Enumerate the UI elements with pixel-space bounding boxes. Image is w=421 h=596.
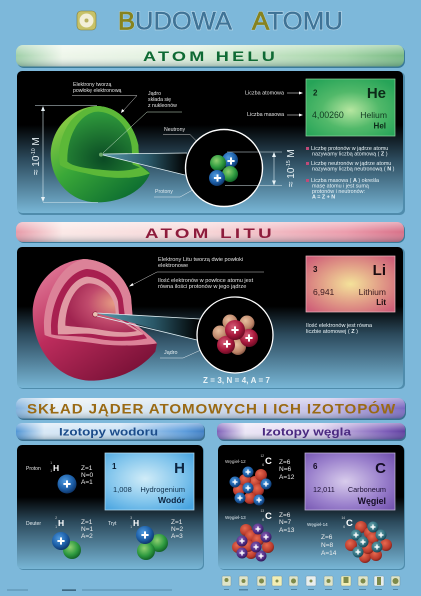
label: nucleus [103,91,182,153]
banner: Atom litu: ATOM LITU [145,225,275,241]
carbon 14: 14 [341,516,345,520]
tritium: 1 [130,525,132,529]
carbon 14: Z=6 [321,534,333,541]
carbon 13: 13 [260,509,264,513]
element card: helium: 2 [313,88,318,98]
element card: lithium: Lit [376,298,386,307]
banner: isotopes heading: SKŁAD JĄDER ATOMOWYCH I ICH IZOTOPÓW [27,400,396,416]
dimension: atom diameter: -10 [31,148,37,156]
tritium: H [133,518,139,528]
label: nucleus: składa się [148,97,171,103]
proton: 1 [50,461,52,465]
title: ATOMU [252,8,343,36]
element card: hydrogen: 1,008 [113,485,132,494]
element card: hydrogen: Hydrogenium [140,485,185,494]
label: nucleus: Jądro [148,91,161,97]
notes: helium definitions: masę atomu i jest sumą [312,184,369,190]
illustration: lithium atom cutaway sphere [33,259,200,381]
proton: A=1 [81,479,93,486]
element card: helium: He [367,85,386,102]
dimension: atom diameter [31,106,98,202]
banner: Atom helu: ATOM HELU [143,48,278,64]
carbon 12: Z=6 [279,459,291,466]
icon: title atom badge [77,11,96,30]
tritium: Tryt [108,521,117,527]
notes: helium definitions: Liczbę neutronów w jądrze atomu [311,161,391,167]
element card: hydrogen [105,453,194,510]
carbon 12: N=6 [279,466,291,473]
note: lithium [306,323,373,335]
title [118,8,343,36]
carbon 14: N=8 [321,542,333,549]
deuterium: A=2 [81,533,93,540]
carbon 12: Węgiel-12 [225,459,246,464]
label: atomic number [245,90,303,96]
notes: helium definitions: protonów i neutronów: [312,189,365,195]
carbon 14: A=14 [321,550,337,557]
banner: carbon isotopes: Izotopy węgla [262,426,352,438]
label: atomic number: Liczba atomowa [245,90,284,96]
element card: lithium: Li [373,262,386,279]
tritium: 3 [130,516,132,520]
element card: carbon: Carboneum [348,485,386,494]
element card: carbon [305,453,395,510]
deuterium: 2 [55,516,57,520]
proton: Z=1 [81,465,93,472]
banner: carbon isotopes [217,423,406,441]
label: lithium electrons: Elektrony Litu tworzą dwie powłoki [158,257,243,263]
element card: carbon: 12,011 [313,485,335,494]
carbon 12 [225,454,295,506]
element card: helium: Helium [360,110,387,120]
element card: helium: Hel [374,122,386,130]
deuterium: N=1 [81,526,93,533]
element card: hydrogen: 1 [112,462,117,471]
label: lithium electrons: Ilość elektronów w powłoce atomu jest [158,278,254,284]
carbon 14: 6 [343,525,345,529]
element card: helium: 4,00260 [312,110,344,120]
label: mass number [247,112,303,118]
notes: helium definitions [306,146,395,200]
proton: N=0 [81,472,93,479]
carbon 13: A=13 [279,527,295,534]
element card: hydrogen: Wodór [158,495,186,505]
label: neutrons [163,127,213,158]
dimension: nucleus diameter: ≈ 10 [286,168,297,187]
proton [26,461,93,494]
note: lithium: liczbie atomowej ( Z ) [306,329,358,335]
element card: hydrogen: H [174,460,185,477]
banner: isotopes heading [16,398,406,420]
element card: lithium: 6,941 [313,287,335,297]
dimension: nucleus diameter: -15 [286,160,292,168]
carbon 13 [225,509,295,562]
proton: H [53,463,59,473]
tritium: Z=1 [171,519,183,526]
carbon 12: A=12 [279,474,295,481]
carbon 14: C [346,518,353,529]
caption: lithium numbers: Z = 3, N = 4, A = 7 [203,376,271,385]
panel: hydrogen isotopes [17,445,204,570]
panel: atom litu [17,247,405,389]
carbon 13: Węgiel-13 [225,515,246,520]
label: lithium electrons: równa ilości protonów w jego jądrze [158,284,246,290]
label: nucleus: Jądro [164,350,178,356]
label: protons [154,182,207,197]
label: lithium electrons: elektronowe [158,263,188,269]
title: ATOMU [252,8,343,36]
dimension: nucleus diameter [225,149,297,187]
label: nucleus: z nukleonów [148,103,177,109]
footer: publisher line [7,590,172,591]
tritium: N=2 [171,526,183,533]
element card: lithium: 3 [313,265,318,274]
element card: carbon: C [375,460,386,477]
carbon 13: 6 [262,518,264,522]
carbon 12: 6 [262,463,264,467]
notes: helium definitions: A = Z + N [312,194,335,200]
carbon 13: C [265,511,272,522]
label: nucleus [160,345,212,358]
deuterium: H [58,518,64,528]
element card: carbon: 6 [313,462,318,471]
deuterium: Deuter [26,521,41,527]
label: lithium electrons [129,257,264,290]
element card: helium [306,79,395,136]
label: electrons [72,82,137,113]
carbon 14: Węgiel-14 [307,522,328,527]
proton: Proton [26,466,41,472]
notes: helium definitions: nazywamy liczbą atomową ( Z ) [312,152,388,158]
proton: 1 [50,469,52,473]
panel: atom helu [17,71,405,215]
element card: lithium [306,256,395,312]
tritium: A=3 [171,533,183,540]
magnified helium nucleus [186,130,262,206]
dimension: atom diameter: ≈ 10 [31,156,42,175]
deuterium: Z=1 [81,519,93,526]
banner: Atom helu [16,45,405,68]
tritium [108,516,183,560]
dimension: atom diameter: M [31,137,42,148]
notes: helium definitions: Liczba masowa ( A ) określa [311,178,379,184]
banner: hydrogen isotopes: Izotopy wodoru [59,426,158,438]
element card: carbon: Węgiel [358,496,386,506]
wedge lines [103,153,187,175]
title: BUDOWA [118,8,232,36]
dimension: nucleus diameter: M [286,149,297,160]
carbon 12: C [265,456,272,467]
notes: helium definitions: Liczbę protonów w jądrze atomu [311,146,388,152]
carbon 13: N=7 [279,519,291,526]
magnified lithium nucleus [197,297,273,373]
title: BUDOWA [118,8,232,36]
carbon 14 [307,516,392,563]
carbon 12: 12 [260,454,264,458]
label: electrons: Elektrony tworzą [73,82,111,88]
panel: carbon isotopes [218,445,405,570]
label: protons: Protony [155,189,173,195]
carbon 13: Z=6 [279,512,291,519]
deuterium: 1 [55,525,57,529]
wedge lines [97,313,200,340]
footer: series thumbnails [222,576,400,590]
label: mass number: Liczba masowa [247,112,284,118]
label: neutrons: Neutrony [164,127,185,133]
notes: helium definitions: nazywamy liczbą neutronową ( N ) [312,166,395,172]
illustration: helium atom cutaway sphere [51,106,187,202]
deuterium [26,516,93,559]
element card: lithium: Lithium [359,287,386,297]
note: lithium: Ilość elektronów jest równa [306,323,373,329]
banner: hydrogen isotopes [16,423,205,441]
banner: Atom litu [16,222,405,243]
label: electrons: powłokę elektronową [73,88,122,94]
